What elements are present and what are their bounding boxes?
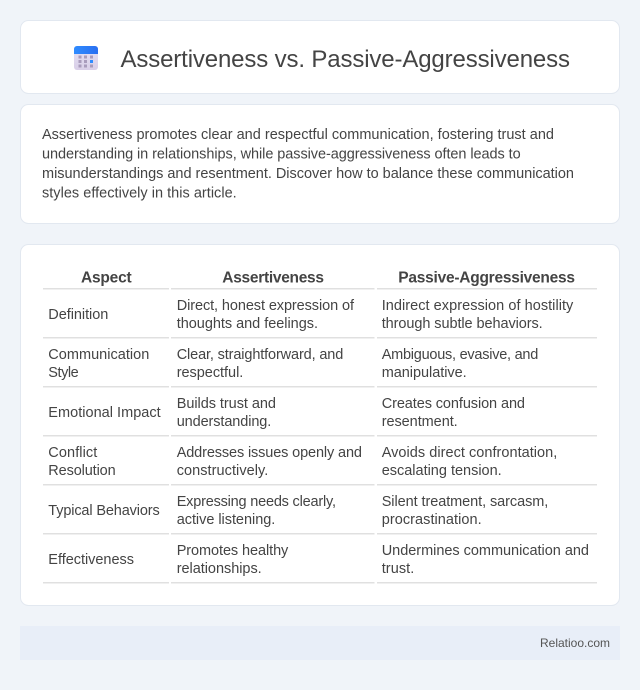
row: conflict resolution: escalating tension. bbox=[382, 463, 502, 479]
row: conflict resolution: Addresses issues openly and bbox=[177, 445, 362, 461]
row: definition: Definition bbox=[48, 307, 108, 323]
table header row: Assertiveness bbox=[222, 270, 324, 286]
footer credit: Relatioo.com bbox=[540, 636, 610, 650]
row: definition: Direct, honest expression of bbox=[177, 298, 355, 314]
row: conflict resolution: Avoids direct confrontation, bbox=[382, 445, 557, 461]
row: typical behaviors: Typical Behaviors bbox=[48, 503, 160, 519]
row: emotional impact: Builds trust and bbox=[177, 396, 276, 412]
intro text: Assertiveness promotes clear and respectful communication, fostering trust and bbox=[42, 127, 554, 143]
row: typical behaviors bbox=[43, 494, 597, 534]
footer bar bbox=[20, 626, 620, 660]
panel: introduction bbox=[20, 104, 620, 224]
row: communication style: Communication bbox=[48, 347, 149, 363]
intro text bbox=[42, 127, 574, 202]
panel: title header bbox=[20, 20, 620, 94]
row: effectiveness: Undermines communication and bbox=[382, 543, 589, 559]
row: conflict resolution: constructively. bbox=[177, 463, 268, 479]
row: conflict resolution bbox=[43, 445, 597, 486]
row: definition bbox=[43, 298, 597, 338]
row: emotional impact: understanding. bbox=[177, 414, 271, 430]
row: effectiveness bbox=[43, 543, 597, 584]
row: typical behaviors: Silent treatment, sarcasm, bbox=[382, 494, 548, 510]
row: typical behaviors: active listening. bbox=[177, 512, 275, 528]
row: communication style bbox=[43, 347, 597, 388]
intro text: misunderstandings and resentment. Discover how to balance these communication bbox=[42, 166, 574, 182]
row: effectiveness: trust. bbox=[382, 561, 414, 577]
table header row bbox=[43, 270, 597, 290]
row: effectiveness: Effectiveness bbox=[48, 552, 134, 568]
row: typical behaviors: Expressing needs clearly, bbox=[177, 494, 336, 510]
row: communication style: manipulative. bbox=[382, 365, 467, 381]
row: emotional impact bbox=[43, 396, 597, 436]
row: typical behaviors: procrastination. bbox=[382, 512, 482, 528]
table header row: Passive-Aggressiveness bbox=[398, 270, 575, 286]
row: communication style: respectful. bbox=[177, 365, 243, 381]
row: communication style: Ambiguous, evasive, and bbox=[382, 347, 538, 363]
intro text: styles effectively in this article. bbox=[42, 186, 237, 202]
row: conflict resolution: Conflict bbox=[48, 445, 97, 461]
row: emotional impact: Creates confusion and bbox=[382, 396, 525, 412]
row: definition: through subtle behaviors. bbox=[382, 316, 543, 332]
row: emotional impact: Emotional Impact bbox=[48, 405, 161, 421]
icon: calendar bbox=[74, 46, 98, 70]
table header row: Aspect bbox=[81, 270, 132, 286]
row: communication style: Clear, straightforward, and bbox=[177, 347, 343, 363]
row: definition: Indirect expression of hostility bbox=[382, 298, 574, 314]
panel: comparison table bbox=[20, 244, 620, 606]
row: conflict resolution: Resolution bbox=[48, 463, 116, 479]
row: definition: thoughts and feelings. bbox=[177, 316, 318, 332]
row: effectiveness: relationships. bbox=[177, 561, 262, 577]
row: emotional impact: resentment. bbox=[382, 414, 458, 430]
row: effectiveness: Promotes healthy bbox=[177, 543, 289, 559]
row: communication style: Style bbox=[48, 365, 79, 381]
intro text: understanding in relationships, while passive-aggressiveness often leads to bbox=[42, 146, 521, 162]
title: Assertiveness vs. Passive-Aggressiveness bbox=[120, 46, 570, 73]
